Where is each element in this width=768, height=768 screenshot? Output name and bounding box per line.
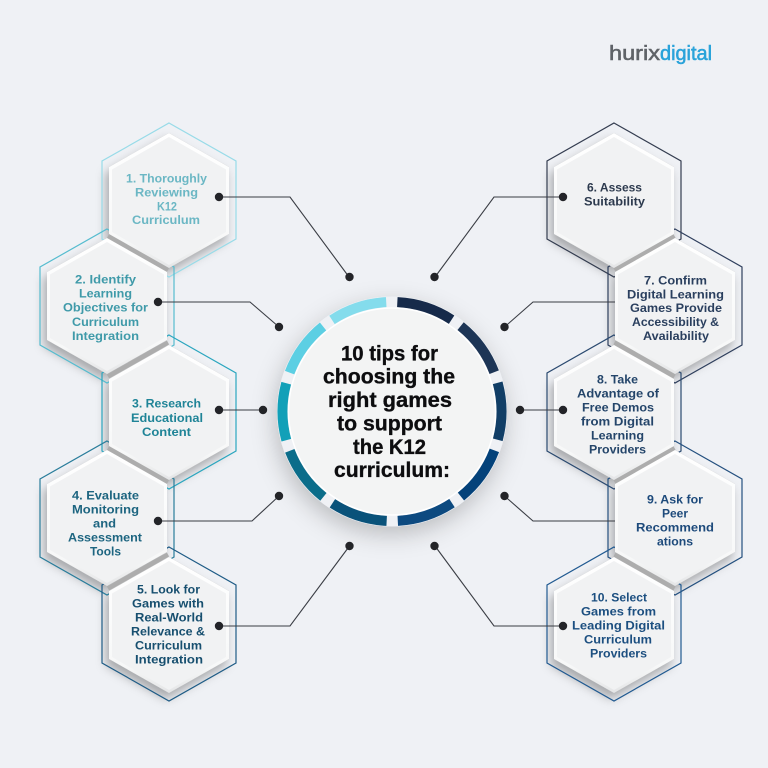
connector: tip 10 bbox=[430, 542, 567, 630]
panel: tip 7: Digital Learning bbox=[627, 288, 724, 302]
title: curriculum: bbox=[334, 459, 450, 482]
panel: tip 2: 2. Identify bbox=[75, 272, 136, 286]
panel: tip 10: Leading Digital bbox=[572, 618, 665, 632]
panel: tip 8: 8. Take bbox=[597, 372, 638, 386]
panel: tip 5 bbox=[109, 557, 229, 693]
connector: tip 7 bbox=[500, 302, 615, 331]
panel: tip 5: Real-World bbox=[135, 610, 203, 624]
panel: tip 8: from Digital bbox=[581, 414, 654, 428]
logo: hurix digital: hurix bbox=[609, 43, 660, 65]
panel: tip 2 bbox=[47, 238, 167, 374]
panel: tip 2: Learning bbox=[79, 286, 132, 300]
panel: tip 8 bbox=[554, 345, 674, 480]
panel: tip 3 bbox=[109, 345, 229, 480]
connector: tip 8 bbox=[516, 406, 567, 414]
panel: tip 1: Curriculum bbox=[132, 213, 200, 227]
title: the K12 bbox=[353, 436, 426, 459]
panel: tip 10: Curriculum bbox=[584, 632, 652, 646]
panel: tip 8: Free Demos bbox=[582, 400, 654, 414]
panel: tip 1: Reviewing bbox=[135, 186, 198, 200]
connector: tip 4 bbox=[154, 492, 283, 525]
panel: tip 10 bbox=[554, 557, 674, 693]
title: choosing the bbox=[323, 366, 455, 388]
title bbox=[323, 342, 455, 482]
panel: tip 4: 4. Evaluate bbox=[72, 488, 139, 502]
panel: tip 7: 7. Confirm bbox=[644, 274, 707, 288]
title: 10 tips for bbox=[341, 342, 438, 366]
panel: tip 2: Objectives for bbox=[63, 300, 148, 314]
panel: tip 7: Accessibility & bbox=[632, 315, 719, 329]
panel: tip 3: Content bbox=[142, 425, 191, 439]
panel: tip 2: Curriculum bbox=[72, 315, 139, 329]
panel: tip 8: Advantage of bbox=[577, 386, 660, 400]
panel: tip 5: Curriculum bbox=[135, 638, 202, 652]
panel: tip 4: and bbox=[93, 516, 116, 530]
panel: tip 4: Monitoring bbox=[72, 502, 139, 516]
connector: tip 5 bbox=[215, 542, 354, 630]
panel: tip 9: Peer bbox=[662, 506, 688, 520]
panel: tip 1: K12 bbox=[157, 200, 177, 214]
panel: tip 7: Availability bbox=[643, 329, 709, 343]
panel: tip 10: Games from bbox=[581, 604, 656, 618]
panel: tip 10: Providers bbox=[590, 646, 647, 660]
shadow strips between hexagons bbox=[108, 236, 674, 588]
hexagon outlines bbox=[40, 123, 742, 701]
connector: tip 6 bbox=[430, 193, 567, 281]
panel: tip 5: 5. Look for bbox=[137, 582, 200, 596]
panel: tip 6 bbox=[554, 133, 674, 268]
panel: tip 10: 10. Select bbox=[591, 590, 647, 604]
panel: tip 6: 6. Assess bbox=[587, 180, 642, 194]
title: right games bbox=[328, 389, 452, 412]
panel: tip 6: Suitability bbox=[584, 194, 645, 208]
panel: tip 5: Integration bbox=[135, 652, 203, 666]
connector: tip 1 bbox=[215, 193, 354, 281]
panel: tip 7 bbox=[615, 238, 735, 374]
panel: tip 1 bbox=[109, 133, 229, 268]
logo: hurix digital bbox=[609, 43, 712, 65]
connector: tip 2 bbox=[154, 298, 283, 331]
connector: tip 9 bbox=[500, 492, 615, 521]
panel: tip 3: 3. Research bbox=[132, 396, 201, 410]
panel: tip 9: Recommend bbox=[636, 520, 714, 534]
panel: tip 4 bbox=[47, 450, 167, 586]
central circle with segmented ring bbox=[238, 257, 546, 566]
panel: tip 7: Games Provide bbox=[630, 301, 722, 315]
connector: tip 3 bbox=[215, 406, 267, 414]
panel: tip 4: Tools bbox=[90, 544, 121, 558]
panel: tip 8: Providers bbox=[589, 442, 646, 456]
panel: tip 3: Educational bbox=[131, 411, 203, 425]
panel: tip 9 bbox=[615, 450, 735, 586]
panel: tip 8: Learning bbox=[591, 428, 644, 442]
panel: tip 4: Assessment bbox=[68, 530, 142, 544]
segmented ring bbox=[238, 257, 546, 566]
panel: tip 5: Games with bbox=[132, 596, 204, 610]
panel: tip 2: Integration bbox=[72, 329, 139, 343]
panel: tip 1: 1. Thoroughly bbox=[126, 172, 207, 186]
hexagon shadows bbox=[47, 133, 735, 693]
panel: tip 9: 9. Ask for bbox=[647, 492, 703, 506]
panel: tip 9: ations bbox=[657, 534, 693, 548]
panel: tip 5: Relevance & bbox=[131, 624, 205, 638]
title: to support bbox=[337, 412, 442, 436]
logo: hurix digital: digital bbox=[660, 43, 712, 65]
